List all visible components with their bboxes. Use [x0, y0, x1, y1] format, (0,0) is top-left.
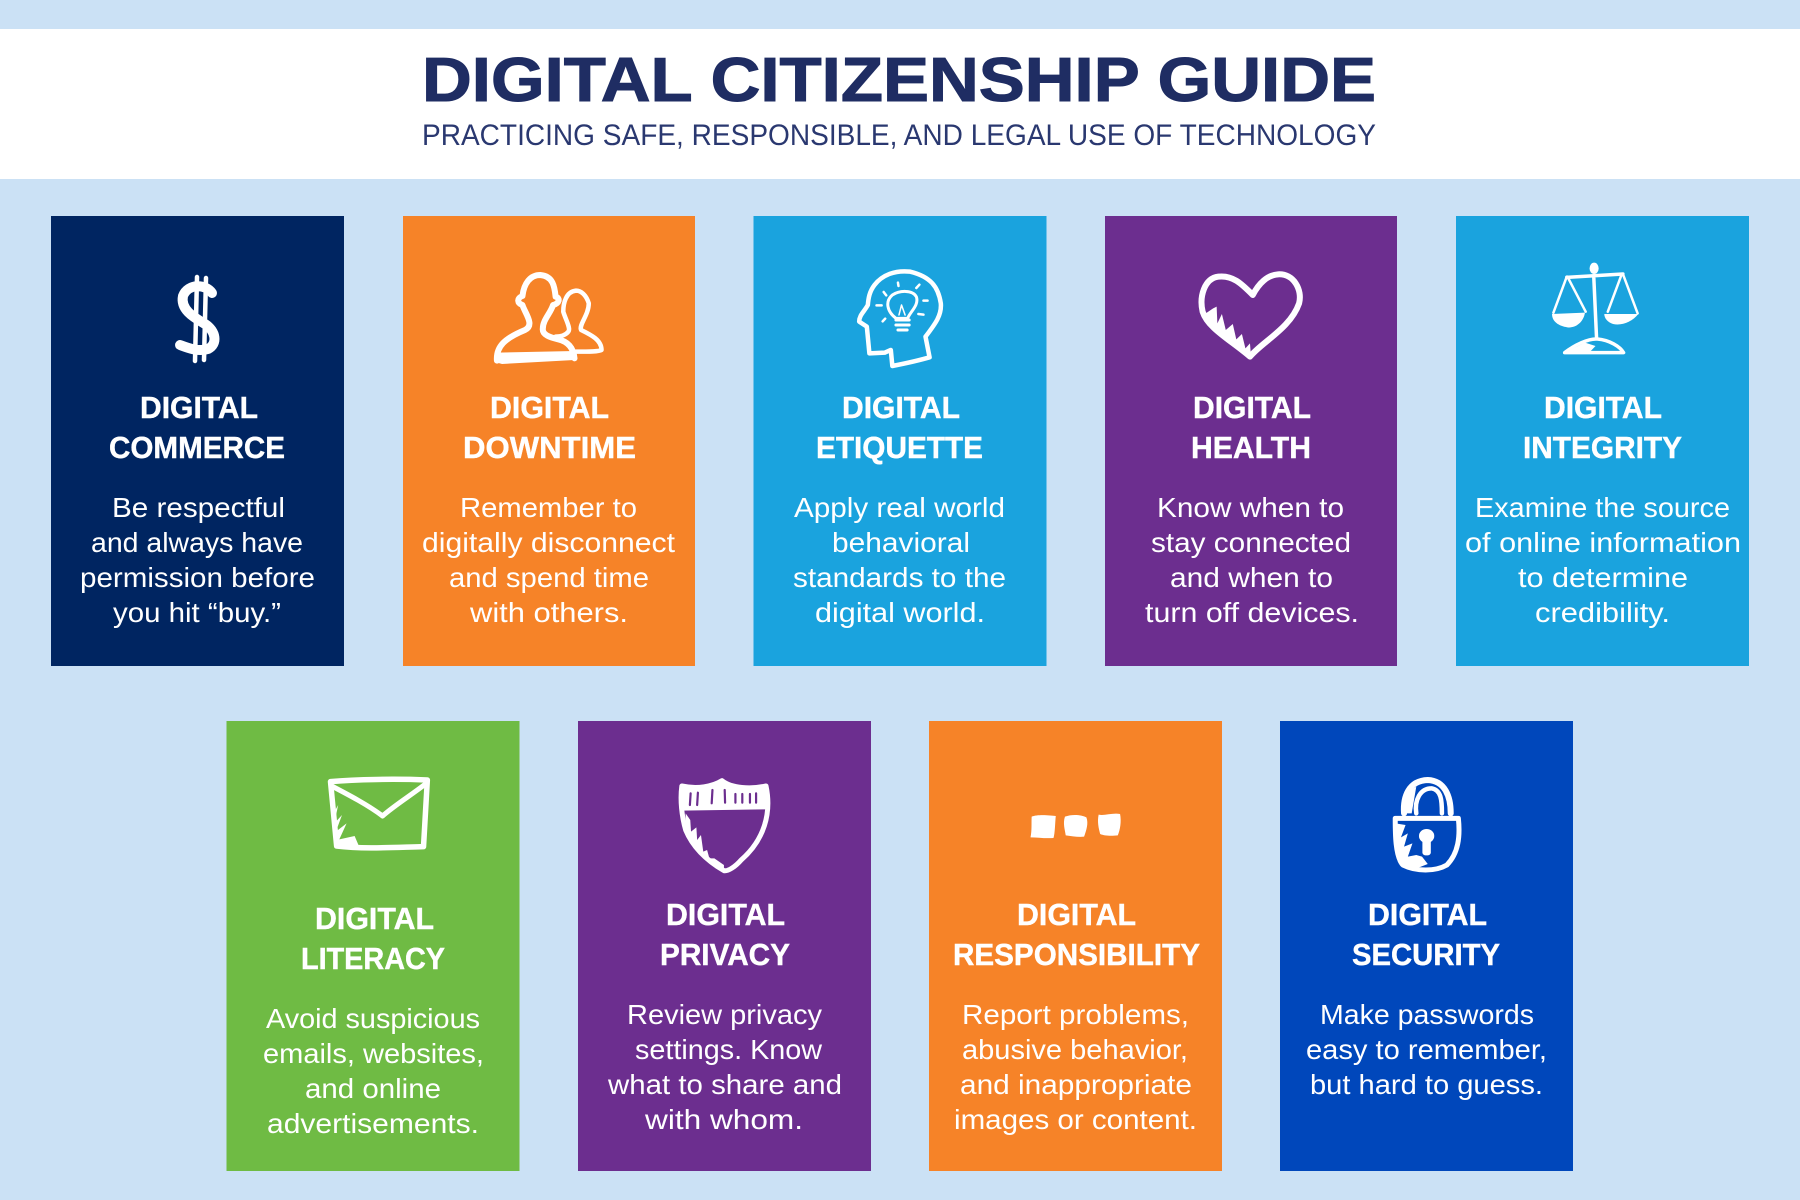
- text: digital integrity description: credibility.: [1535, 597, 1670, 628]
- heading: digital privacy: PRIVACY: [660, 937, 790, 972]
- panel: digital privacy: [578, 721, 871, 1171]
- text: digital commerce description: you hit “buy.”: [113, 597, 281, 628]
- heading: digital etiquette: ETIQUETTE: [816, 430, 983, 465]
- text: digital downtime description: [422, 492, 675, 628]
- heading: digital commerce: [109, 390, 285, 465]
- text: digital downtime description: and spend time: [449, 562, 649, 593]
- heading: digital downtime: DIGITAL: [490, 390, 609, 425]
- text: digital health description: and when to: [1170, 562, 1333, 593]
- text: digital literacy description: emails, websites,: [263, 1038, 484, 1069]
- panel: digital health: [1105, 216, 1397, 666]
- heading: digital etiquette: [816, 390, 983, 465]
- icon: two people: [495, 275, 602, 364]
- heading: digital literacy: DIGITAL: [315, 901, 434, 936]
- panel: digital etiquette: [754, 216, 1046, 666]
- heading: digital commerce: COMMERCE: [109, 430, 285, 465]
- heading: digital privacy: DIGITAL: [666, 897, 785, 932]
- text: digital downtime description: with others.: [469, 597, 628, 628]
- text: digital security description: Make passwords: [1320, 999, 1534, 1030]
- text: digital etiquette description: [793, 492, 1006, 628]
- heading: digital downtime: DOWNTIME: [463, 430, 636, 465]
- heading: digital literacy: LITERACY: [301, 941, 445, 976]
- header band: [0, 29, 1800, 179]
- panel: digital downtime: [403, 216, 695, 666]
- icon: head with light bulb: [859, 271, 941, 366]
- text: digital privacy description: with whom.: [644, 1104, 803, 1135]
- text: digital health description: [1145, 492, 1359, 628]
- text: digital privacy description: what to share and: [607, 1069, 842, 1100]
- heading: digital integrity: DIGITAL: [1544, 390, 1662, 425]
- text: digital integrity description: Examine the source: [1475, 492, 1730, 523]
- heading: digital commerce: DIGITAL: [140, 390, 258, 425]
- heading: digital responsibility: [953, 897, 1200, 972]
- text: digital security description: [1306, 999, 1547, 1100]
- text: digital security description: easy to remember,: [1306, 1034, 1547, 1065]
- title: DIGITAL CITIZENSHIP GUIDE: [422, 46, 1376, 115]
- icon: balance scale: [1552, 263, 1638, 353]
- heading: digital integrity: [1523, 390, 1682, 465]
- text: digital commerce description: permission before: [80, 562, 315, 593]
- panel: digital commerce: [51, 216, 344, 666]
- panel: digital literacy: [226, 721, 520, 1171]
- heading: digital literacy: [301, 901, 445, 976]
- text: digital privacy description: [607, 999, 842, 1135]
- text: digital health description: Know when to: [1157, 492, 1344, 523]
- heading: digital health: DIGITAL: [1193, 390, 1311, 425]
- text: digital responsibility description: images or content.: [954, 1104, 1197, 1135]
- text: digital etiquette description: behavioral: [832, 527, 970, 558]
- text: digital integrity description: [1465, 492, 1741, 628]
- text: digital integrity description: to determine: [1518, 562, 1688, 593]
- text: digital security description: but hard to guess.: [1310, 1069, 1543, 1100]
- text: digital responsibility description: [954, 999, 1197, 1135]
- text: digital downtime description: Remember to: [460, 492, 637, 523]
- heading: digital responsibility: DIGITAL: [1017, 897, 1136, 932]
- heading: digital security: [1352, 897, 1500, 972]
- text: digital literacy description: [263, 1003, 484, 1139]
- text: digital health description: turn off devices.: [1145, 597, 1359, 628]
- icon: padlock: [1395, 780, 1459, 870]
- heading: digital health: [1191, 390, 1311, 465]
- text: digital commerce description: Be respectful: [112, 492, 285, 523]
- icon: heart: [1202, 274, 1300, 357]
- subtitle: PRACTICING SAFE, RESPONSIBLE, AND LEGAL USE OF TECHNOLOGY: [422, 119, 1376, 152]
- icon: shield: [681, 781, 768, 871]
- text: digital etiquette description: Apply real world: [794, 492, 1005, 523]
- heading: digital privacy: [660, 897, 790, 972]
- icon: envelope: [331, 779, 427, 848]
- text: digital literacy description: Avoid suspicious: [266, 1003, 480, 1034]
- text: digital health description: stay connected: [1151, 527, 1351, 558]
- icon: dollar sign: [180, 277, 214, 361]
- text: digital literacy description: and online: [305, 1073, 441, 1104]
- text: digital responsibility description: and inappropriate: [960, 1069, 1192, 1100]
- heading: digital integrity: INTEGRITY: [1523, 430, 1682, 465]
- text: digital responsibility description: Report problems,: [962, 999, 1189, 1030]
- heading: digital responsibility: RESPONSIBILITY: [953, 937, 1200, 972]
- text: digital responsibility description: abusive behavior,: [962, 1034, 1188, 1065]
- text: digital downtime description: digitally disconnect: [422, 527, 675, 558]
- panel: digital integrity: [1456, 216, 1749, 666]
- text: digital privacy description: Review privacy: [627, 999, 822, 1030]
- text: digital etiquette description: standards to the: [793, 562, 1006, 593]
- panel: digital responsibility: [929, 721, 1222, 1171]
- text: digital etiquette description: digital world.: [815, 597, 985, 628]
- icon: three rough squares: [1031, 814, 1121, 838]
- heading: digital security: SECURITY: [1352, 937, 1500, 972]
- heading: digital health: HEALTH: [1191, 430, 1311, 465]
- text: digital literacy description: advertisements.: [267, 1108, 479, 1139]
- text: digital commerce description: [80, 492, 315, 628]
- panel: digital security: [1280, 721, 1573, 1171]
- heading: digital etiquette: DIGITAL: [842, 390, 960, 425]
- text: digital privacy description: settings. Know: [635, 1034, 823, 1065]
- heading: digital security: DIGITAL: [1368, 897, 1487, 932]
- heading: digital downtime: [463, 390, 636, 465]
- text: digital integrity description: of online information: [1465, 527, 1741, 558]
- text: digital commerce description: and always have: [91, 527, 303, 558]
